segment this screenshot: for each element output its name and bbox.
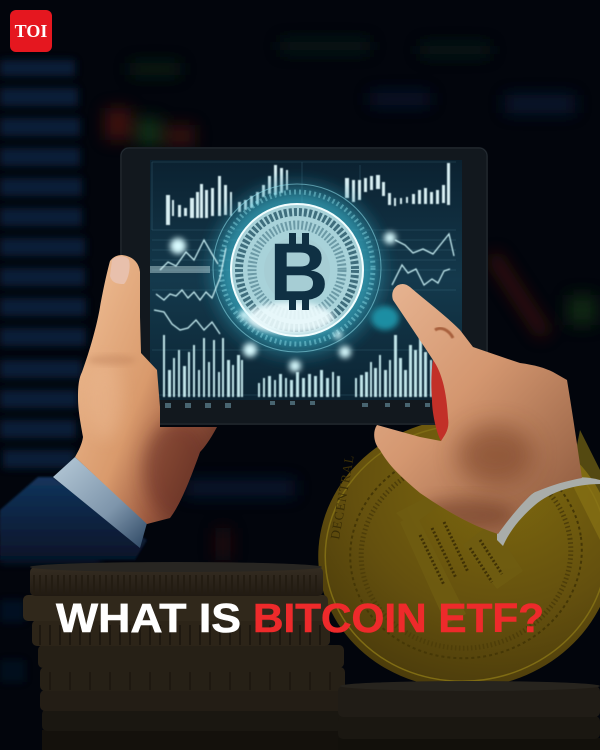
right shirt cuff bbox=[497, 477, 600, 546]
bar chart: bottom right bbox=[355, 330, 432, 397]
symbol verticals bbox=[289, 233, 309, 310]
left thumbnail bbox=[110, 256, 130, 284]
left shirt cuff bbox=[53, 457, 147, 548]
knuckle crease bbox=[435, 328, 453, 338]
left hand shading bbox=[87, 355, 212, 520]
TOI logo: TOI bbox=[15, 21, 47, 41]
blurred candlesticks behind tablet bbox=[105, 40, 596, 560]
blurred market data rows, left bbox=[0, 60, 100, 682]
right coin stack bbox=[338, 681, 600, 750]
TOI logo bbox=[10, 10, 52, 52]
left line charts bbox=[154, 240, 226, 334]
coin glow bbox=[197, 170, 397, 370]
candle chart: top left bbox=[166, 165, 288, 225]
candle chart: top right bbox=[345, 163, 450, 206]
large gold bitcoin coin bbox=[301, 399, 600, 707]
ring around coin bbox=[213, 184, 381, 352]
left hand bbox=[75, 255, 217, 524]
faint grid lines bbox=[152, 162, 456, 395]
bar chart: bottom left bbox=[163, 335, 243, 397]
bar chart: bottom centre bbox=[258, 370, 340, 397]
red finger shadow bbox=[431, 360, 448, 441]
tablet screen bbox=[150, 160, 462, 400]
tablet bbox=[120, 147, 488, 425]
title: WHAT IS bbox=[56, 595, 241, 641]
right hand shading bbox=[415, 425, 533, 531]
right hand bbox=[374, 284, 582, 534]
right line charts bbox=[392, 234, 454, 285]
bitcoin coin on screen bbox=[231, 204, 363, 336]
glowing nodes bbox=[170, 232, 396, 372]
teal glow near finger bbox=[371, 306, 399, 330]
bitcoin symbol: B bbox=[269, 227, 329, 318]
left sleeve bbox=[0, 477, 147, 560]
coin inscription: DECENTRAL bbox=[327, 453, 357, 541]
axis ticks bbox=[165, 401, 430, 408]
left coin stack bbox=[23, 562, 345, 750]
title: BITCOIN ETF? bbox=[253, 595, 544, 641]
